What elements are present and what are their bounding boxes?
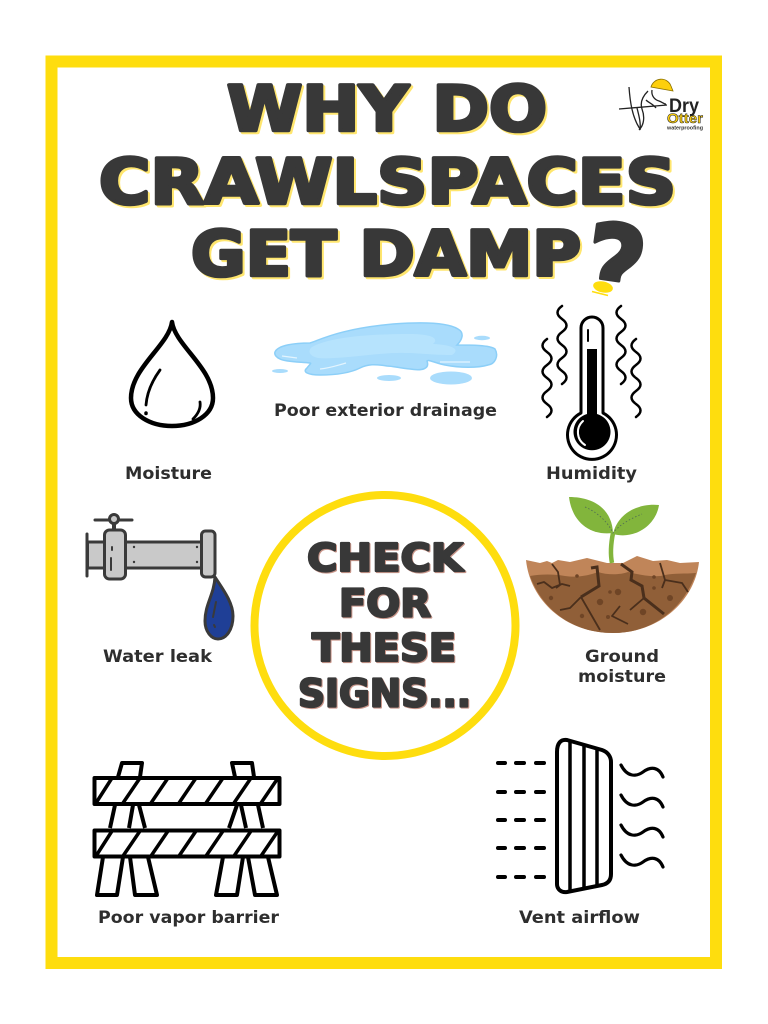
callout text: THESE [312,626,456,671]
humidity waves [542,306,640,417]
logo wordmark: Dry [669,96,699,117]
icon: barrier [94,763,280,895]
title: GET DAMP [191,218,581,290]
label: ground moisture: moisture [578,667,666,687]
label: poor vapor barrier: Poor vapor barrier [98,908,280,928]
label: moisture: Moisture [125,464,212,484]
label: vent airflow: Vent airflow [519,908,640,928]
icon: thermometer [542,306,640,459]
callout text [298,536,471,716]
sprout stem [611,533,613,563]
incoming air dashes [498,763,544,877]
icon: soil with sprout [526,497,699,633]
logo: Dry Otter waterproofing [619,79,704,132]
outgoing air waves [621,765,663,867]
title: CRAWLSPACES [99,146,676,218]
logo: Dry Otter waterproofing: waterproofing [666,126,703,132]
label: ground moisture [578,647,666,687]
thermometer body [568,317,616,459]
poster [46,56,722,969]
icon: puddle [272,323,497,384]
center circle callout [254,495,516,756]
icon: vent airflow [498,740,663,892]
icon: water drop [131,322,213,426]
vent body [557,740,611,892]
soil mound [526,556,699,633]
sprout leaves [569,497,613,533]
icon: leaking pipe [87,514,233,639]
thermometer mercury [574,349,610,450]
label: ground moisture: Ground [585,647,659,667]
yellow border frame [52,62,716,963]
callout text: CHECK [307,536,464,581]
label: water leak: Water leak [103,647,213,667]
logo: Dry Otter waterproofing: Otter [667,110,704,126]
yellow ring [254,495,516,756]
question mark: ? [575,199,654,341]
title [99,72,676,290]
question mark [592,220,644,296]
title: WHY DO [227,72,547,146]
soil cracks [537,563,688,630]
logo figure [619,87,667,130]
label: humidity: Humidity [546,464,637,484]
callout text: FOR [339,582,431,626]
callout text: SIGNS... [298,672,471,716]
label: poor exterior drainage: Poor exterior drainage [274,401,497,421]
logo helmet [651,79,673,91]
